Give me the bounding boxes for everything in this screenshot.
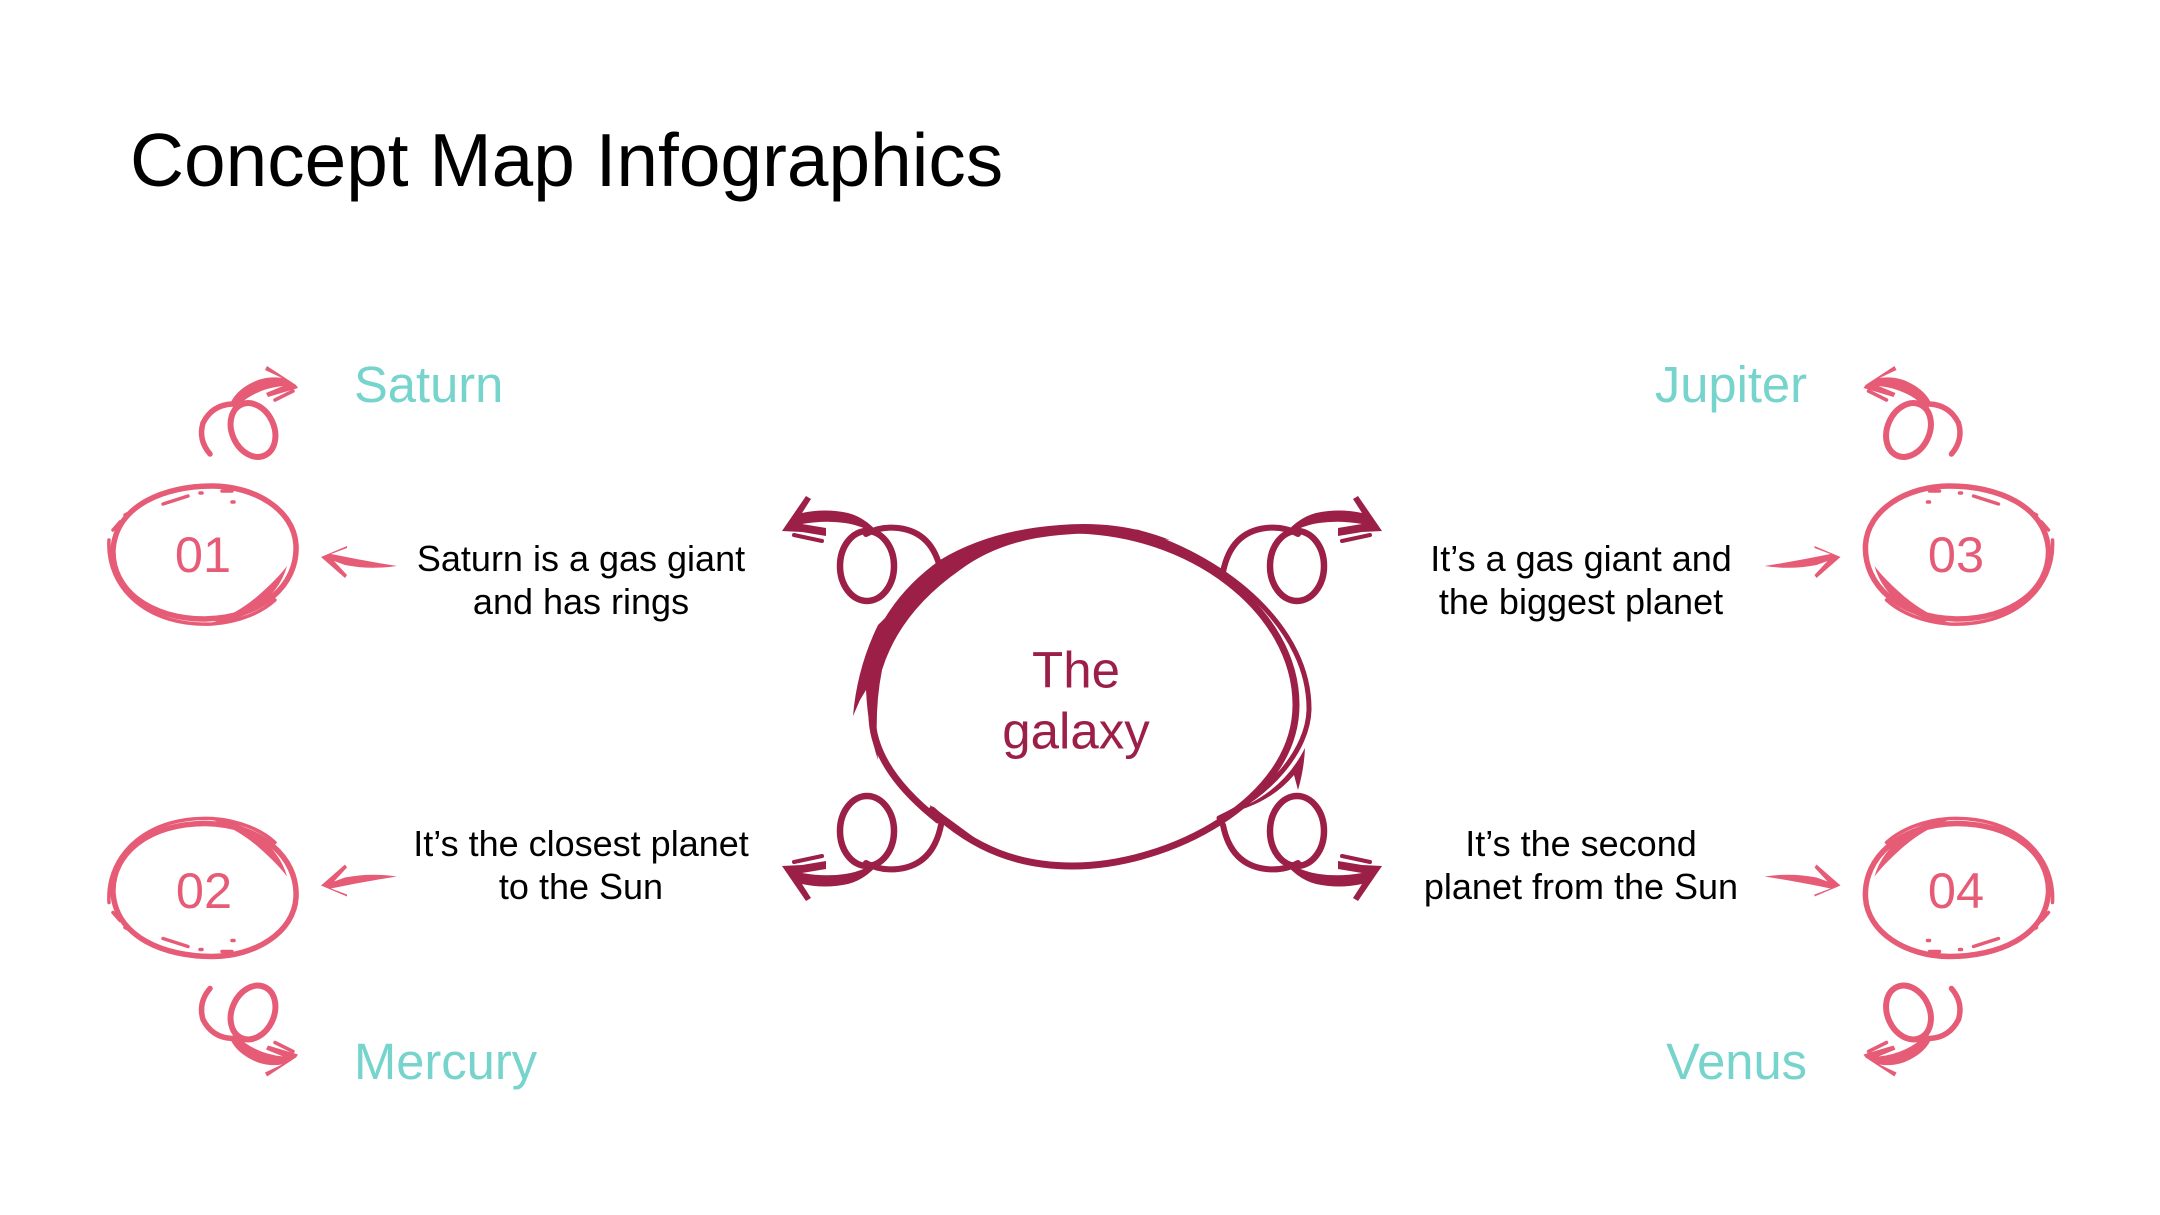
- arrow: text to 02: [321, 864, 397, 896]
- label: Mercury: Mercury: [354, 1033, 538, 1090]
- central galaxy ring: [853, 524, 1309, 866]
- text: Venus description: It’s the second: [1465, 823, 1697, 864]
- ring: thick lower-right stroke: [1220, 748, 1305, 815]
- central label: [1002, 642, 1150, 760]
- node 02: [109, 818, 296, 956]
- text: Mercury description: to the Sun: [499, 866, 663, 907]
- ring: thick upper-left stroke: [853, 524, 1170, 760]
- text: Jupiter description: It’s a gas giant and: [1430, 538, 1732, 579]
- text: Jupiter description: the biggest planet: [1439, 581, 1723, 622]
- node 04: 04: [1928, 862, 1984, 919]
- arrow: central top-right curl: [1223, 496, 1382, 601]
- text: Saturn description: and has rings: [473, 581, 689, 622]
- text: Jupiter description: [1430, 538, 1732, 622]
- ring: inner outline: [872, 530, 1296, 866]
- node 01: 01: [175, 526, 231, 583]
- arrow: curl to Jupiter: [1864, 366, 1960, 464]
- node 01: [109, 486, 296, 624]
- text: Saturn description: [417, 538, 745, 622]
- arrow: text to 01: [321, 546, 397, 578]
- ring: outer sketch stroke: [1137, 532, 1309, 818]
- label: Jupiter: Jupiter: [1655, 356, 1807, 413]
- text: Venus description: planet from the Sun: [1424, 866, 1738, 907]
- ring: lower-left notch: [930, 805, 980, 848]
- central label: galaxy: [1002, 702, 1150, 760]
- node 04: [1865, 818, 2053, 956]
- central label: The: [1032, 642, 1120, 698]
- node 02: 02: [176, 862, 232, 919]
- text: Mercury description: It’s the closest planet: [413, 823, 749, 864]
- arrow: central top-left curl: [782, 496, 941, 601]
- text: Venus description: [1424, 823, 1738, 907]
- arrow: text to 04: [1764, 864, 1840, 896]
- node 03: [1865, 486, 2053, 624]
- title: Concept Map Infographics: [130, 118, 1003, 202]
- arrow: central bottom-right curl: [1223, 796, 1382, 901]
- arrow: central bottom-left curl: [782, 796, 941, 901]
- label: Venus: Venus: [1666, 1033, 1807, 1090]
- text: Mercury description: [413, 823, 749, 907]
- arrow: curl to Venus: [1864, 978, 1960, 1076]
- arrow: text to 03: [1764, 546, 1840, 578]
- node 03: 03: [1928, 526, 1984, 583]
- label: Saturn: Saturn: [354, 356, 503, 413]
- text: Saturn description: Saturn is a gas giant: [417, 538, 745, 579]
- arrow: curl to Saturn: [202, 366, 298, 464]
- arrow: curl to Mercury: [202, 978, 298, 1076]
